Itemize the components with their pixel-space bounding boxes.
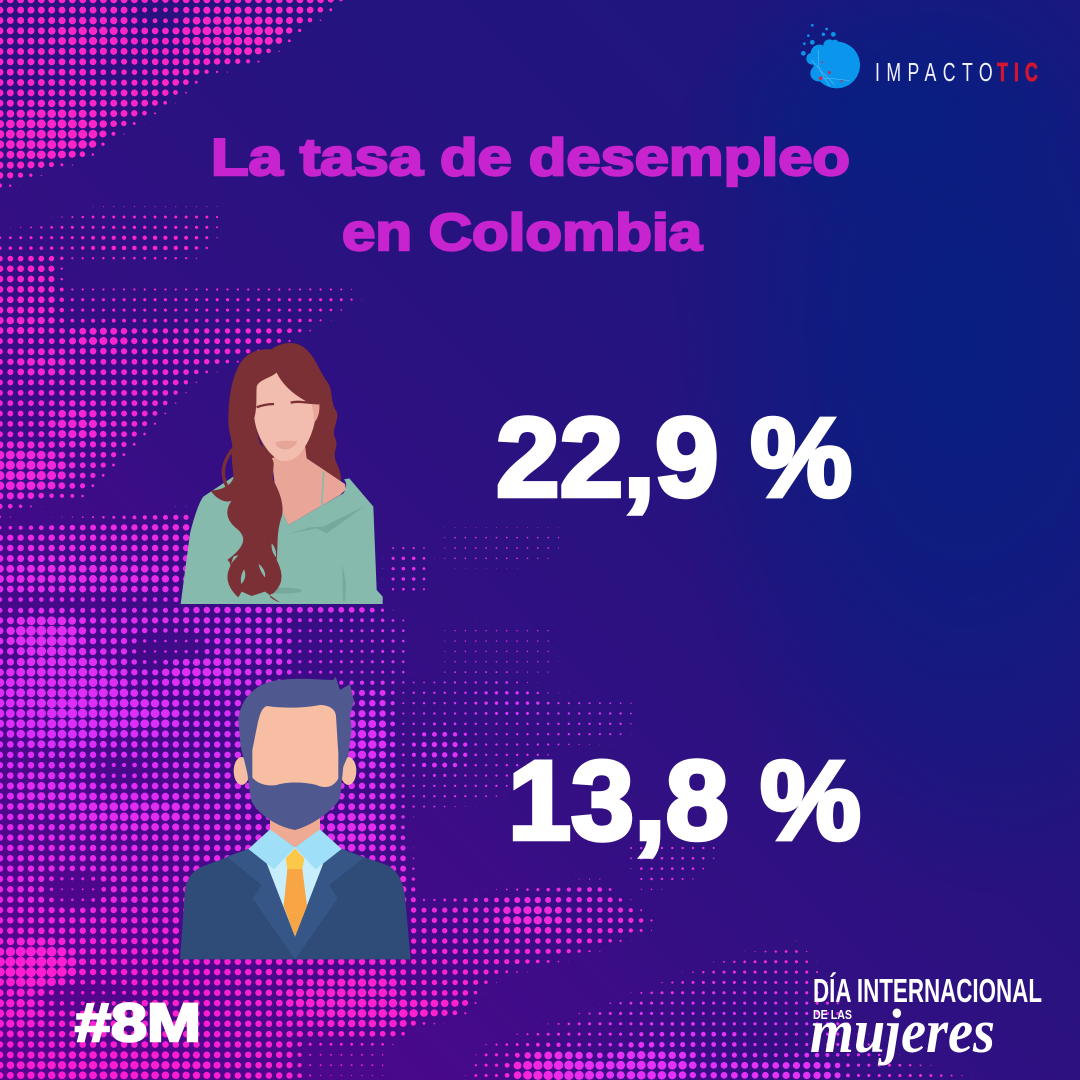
stat: women's unemployment rate: 22,9 % xyxy=(496,395,852,520)
icon: man xyxy=(180,677,411,959)
logo wordmark: TIC xyxy=(997,58,1038,87)
logo: Día Internacional de las Mujeres xyxy=(810,972,1042,1066)
title: en Colombia xyxy=(342,204,703,262)
logo: Día Internacional de las Mujeres: DE LAS xyxy=(813,1007,852,1022)
icon: logo globe xyxy=(801,24,860,88)
logo wordmark: IMPACTO xyxy=(875,58,993,87)
logo: Día Internacional de las Mujeres: mujeres xyxy=(810,998,995,1066)
title xyxy=(211,129,850,262)
logo: ImpactoTIC xyxy=(801,24,1038,88)
hashtag: #8M xyxy=(75,993,201,1053)
stat: men's unemployment rate: 13,8 % xyxy=(508,738,861,863)
title: La tasa de desempleo xyxy=(211,129,850,187)
icon: woman xyxy=(181,343,383,604)
